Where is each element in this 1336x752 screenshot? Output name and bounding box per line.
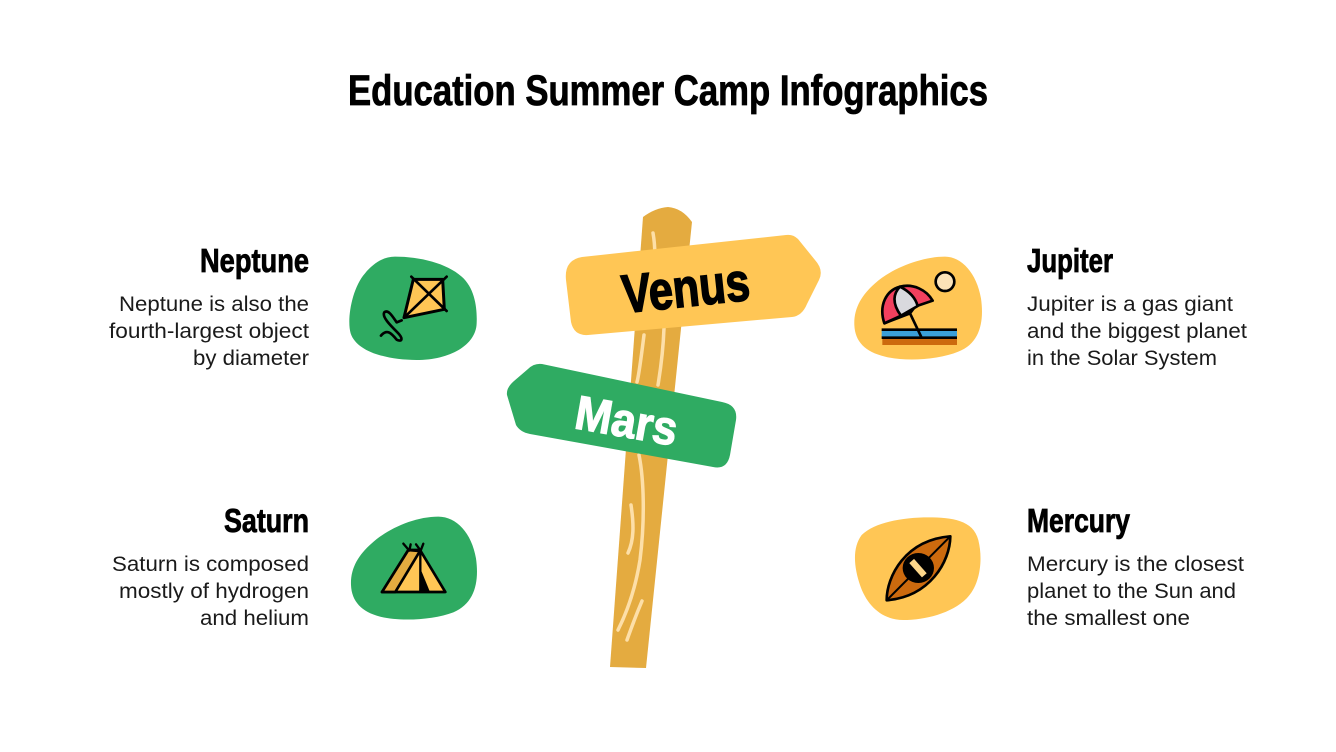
- text: Neptune description: Neptune is also the: [119, 292, 309, 316]
- text: Neptune description: fourth-largest object: [109, 319, 309, 343]
- text: Neptune description: by diameter: [193, 346, 309, 370]
- panel: Neptune: [109, 242, 477, 370]
- icon: tent on green blob: [351, 517, 477, 620]
- icon: beach umbrella on yellow blob: [854, 257, 982, 359]
- text: Jupiter description: Jupiter is a gas giant: [1027, 292, 1233, 316]
- title: Education Summer Camp Infographics: [348, 67, 988, 115]
- text: Mercury description: planet to the Sun and: [1027, 579, 1236, 603]
- heading: Saturn: Saturn: [224, 502, 309, 539]
- icon: canoe on yellow blob: [855, 517, 981, 620]
- text: Neptune description: [109, 292, 309, 370]
- sign: Mars: [507, 364, 736, 468]
- heading: Mercury: Mercury: [1027, 502, 1131, 539]
- text: Mercury description: [1027, 552, 1244, 630]
- text: Jupiter description: in the Solar System: [1027, 346, 1217, 370]
- heading: Jupiter: Jupiter: [1027, 242, 1113, 279]
- text: Mercury description: the smallest one: [1027, 606, 1190, 630]
- panel: Jupiter: [854, 242, 1247, 370]
- text: Saturn description: Saturn is composed: [112, 552, 309, 576]
- panel: Mercury: [855, 502, 1244, 630]
- text: Jupiter description: [1027, 292, 1247, 370]
- text: Saturn description: mostly of hydrogen: [119, 579, 309, 603]
- sign: Venus: Venus: [619, 252, 753, 325]
- icon: kite on green blob: [349, 257, 477, 360]
- text: Jupiter description: and the biggest planet: [1027, 319, 1247, 343]
- sign: Mars: Mars: [571, 387, 682, 457]
- signpost: [507, 207, 821, 668]
- text: Saturn description: [112, 552, 309, 630]
- panel: Saturn: [112, 502, 477, 630]
- text: Mercury description: Mercury is the closest: [1027, 552, 1244, 576]
- wooden post: [610, 207, 692, 668]
- sign: Venus: [566, 235, 821, 335]
- text: Saturn description: and helium: [200, 606, 309, 630]
- heading: Neptune: Neptune: [200, 242, 309, 279]
